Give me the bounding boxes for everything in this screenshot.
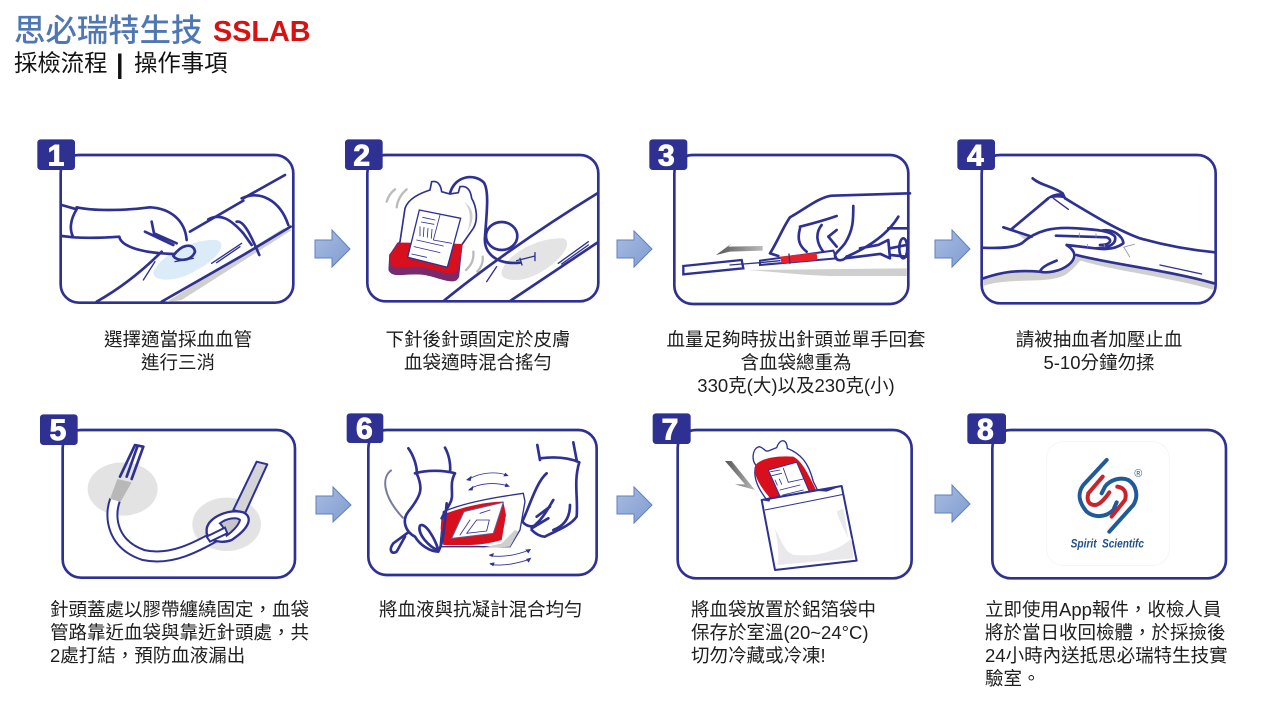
panel: step 3 — [649, 139, 910, 304]
arrow 1-2 — [315, 230, 350, 267]
badge 4 — [957, 139, 995, 172]
frame 7 — [678, 430, 912, 578]
frame 4 — [982, 155, 1216, 303]
subtitle: 採檢流程 — [14, 50, 108, 76]
illustration: mixing blood bag — [385, 442, 579, 566]
arrow 3-4 — [935, 230, 970, 267]
arrow 5-6 — [316, 487, 351, 522]
panel: step 2 — [345, 139, 598, 301]
panel: step 4 — [957, 139, 1216, 303]
badge 5 — [40, 414, 78, 447]
caption 7: 保存於室溫(20~24°C) — [691, 622, 869, 643]
subtitle: | — [116, 49, 124, 79]
frame 5 — [63, 430, 295, 578]
badge 3 — [649, 139, 687, 172]
badge 1: 1 — [48, 139, 64, 172]
panel: step 8 — [967, 413, 1226, 578]
badge 7 — [653, 413, 691, 446]
badge 6: 6 — [356, 412, 373, 445]
app icon: Spirit Scientific logo: ® — [1134, 468, 1142, 480]
arrow 7-8 — [935, 485, 970, 522]
caption 2: 下針後針頭固定於皮膚 — [385, 329, 571, 350]
illustration: tube knot — [88, 445, 267, 556]
badge 5: 5 — [50, 414, 66, 447]
caption 5: 針頭蓋處以膠帶纏繞固定，血袋 — [50, 599, 309, 620]
caption 4: 請被抽血者加壓止血 — [1016, 329, 1182, 350]
title: SSLAB — [213, 16, 311, 48]
frame 6 — [368, 430, 597, 575]
panel: step 6 — [347, 412, 597, 575]
caption 7: 切勿冷藏或冷凍! — [691, 645, 826, 666]
subtitle: 操作事項 — [134, 50, 228, 76]
panel: step 7 — [653, 413, 912, 578]
caption 6: 將血液與抗凝計混合均勻 — [379, 599, 583, 620]
badge 6 — [347, 412, 383, 445]
caption 1: 選擇適當採血血管 — [104, 329, 252, 350]
illustration: blood bag and needle — [387, 177, 597, 301]
panel: step 5 — [40, 414, 295, 578]
caption 4: 5-10分鐘勿揉 — [1043, 352, 1155, 373]
badge 3: 3 — [658, 139, 675, 172]
caption 3: 含血袋總重為 — [740, 352, 852, 373]
badge 1 — [37, 139, 75, 172]
caption 2: 血袋適時混合搖勻 — [404, 352, 552, 373]
arrow 2-3 — [617, 231, 652, 267]
badge 7: 7 — [662, 413, 678, 446]
caption 8: 將於當日收回檢體，於採撿後 — [985, 622, 1226, 643]
badge 2 — [345, 139, 383, 172]
frame 8 — [992, 430, 1226, 578]
panel: step 1 — [37, 139, 293, 303]
badge 4: 4 — [967, 139, 984, 172]
caption 7: 將血袋放置於鋁箔袋中 — [691, 599, 876, 620]
badge 2: 2 — [353, 139, 370, 172]
app icon: Spirit Scientific logo: Scientifc — [1102, 537, 1144, 551]
caption 8: 立即使用App報件，收檢人員 — [985, 599, 1221, 620]
caption 5: 2處打結，預防血液漏出 — [50, 645, 245, 666]
caption 5: 管路靠近血袋與靠近針頭處，共 — [50, 622, 309, 643]
frame 1 — [61, 155, 293, 303]
caption 8: 驗室。 — [985, 668, 1041, 689]
illustration: cleaning the arm — [62, 175, 292, 302]
app icon: Spirit Scientific logo: Spirit — [1071, 537, 1097, 551]
illustration: withdrawing needle — [683, 193, 910, 276]
badge 8 — [967, 413, 1006, 446]
illustration: applying pressure — [982, 178, 1215, 290]
illustration: bag into foil pouch — [725, 441, 857, 570]
caption 3: 330克(大)以及230克(小) — [697, 375, 895, 396]
caption 3: 血量足夠時拔出針頭並單手回套 — [666, 329, 926, 350]
arrow 6-7 — [617, 487, 652, 523]
frame 2 — [367, 155, 598, 301]
title: 思必瑞特生技 — [14, 13, 202, 48]
badge 8: 8 — [977, 413, 994, 446]
app icon: Spirit Scientific logo — [1047, 442, 1169, 566]
caption 1: 進行三消 — [141, 352, 215, 373]
caption 8: 24小時內送抵思必瑞特生技實 — [985, 645, 1228, 666]
frame 3 — [674, 155, 908, 304]
